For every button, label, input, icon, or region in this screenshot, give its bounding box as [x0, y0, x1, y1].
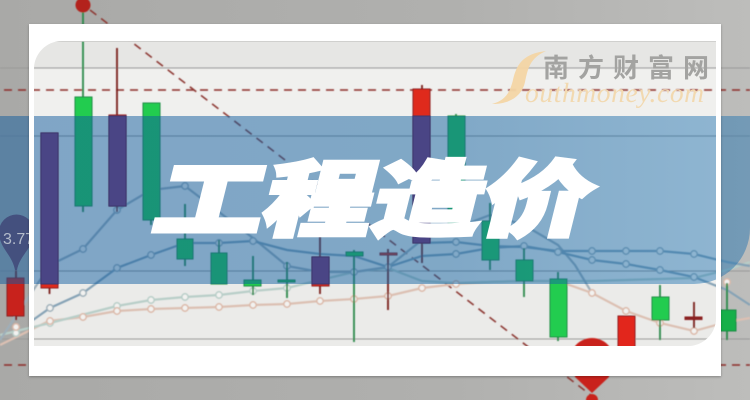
title: 工程造价: [146, 155, 605, 247]
inner rounded panel: [34, 41, 716, 346]
blue band, outer portion: [0, 116, 750, 284]
logo swash: [492, 51, 546, 104]
watermark Chinese name: 南方财富网: [543, 53, 718, 83]
left price pin: 3.77: [3, 231, 34, 248]
watermark URL: outhmoney.com: [525, 77, 705, 108]
red candles under band: [41, 116, 430, 284]
left price pin: [0, 214, 34, 270]
watermark: Southmoney logo: [492, 51, 718, 108]
